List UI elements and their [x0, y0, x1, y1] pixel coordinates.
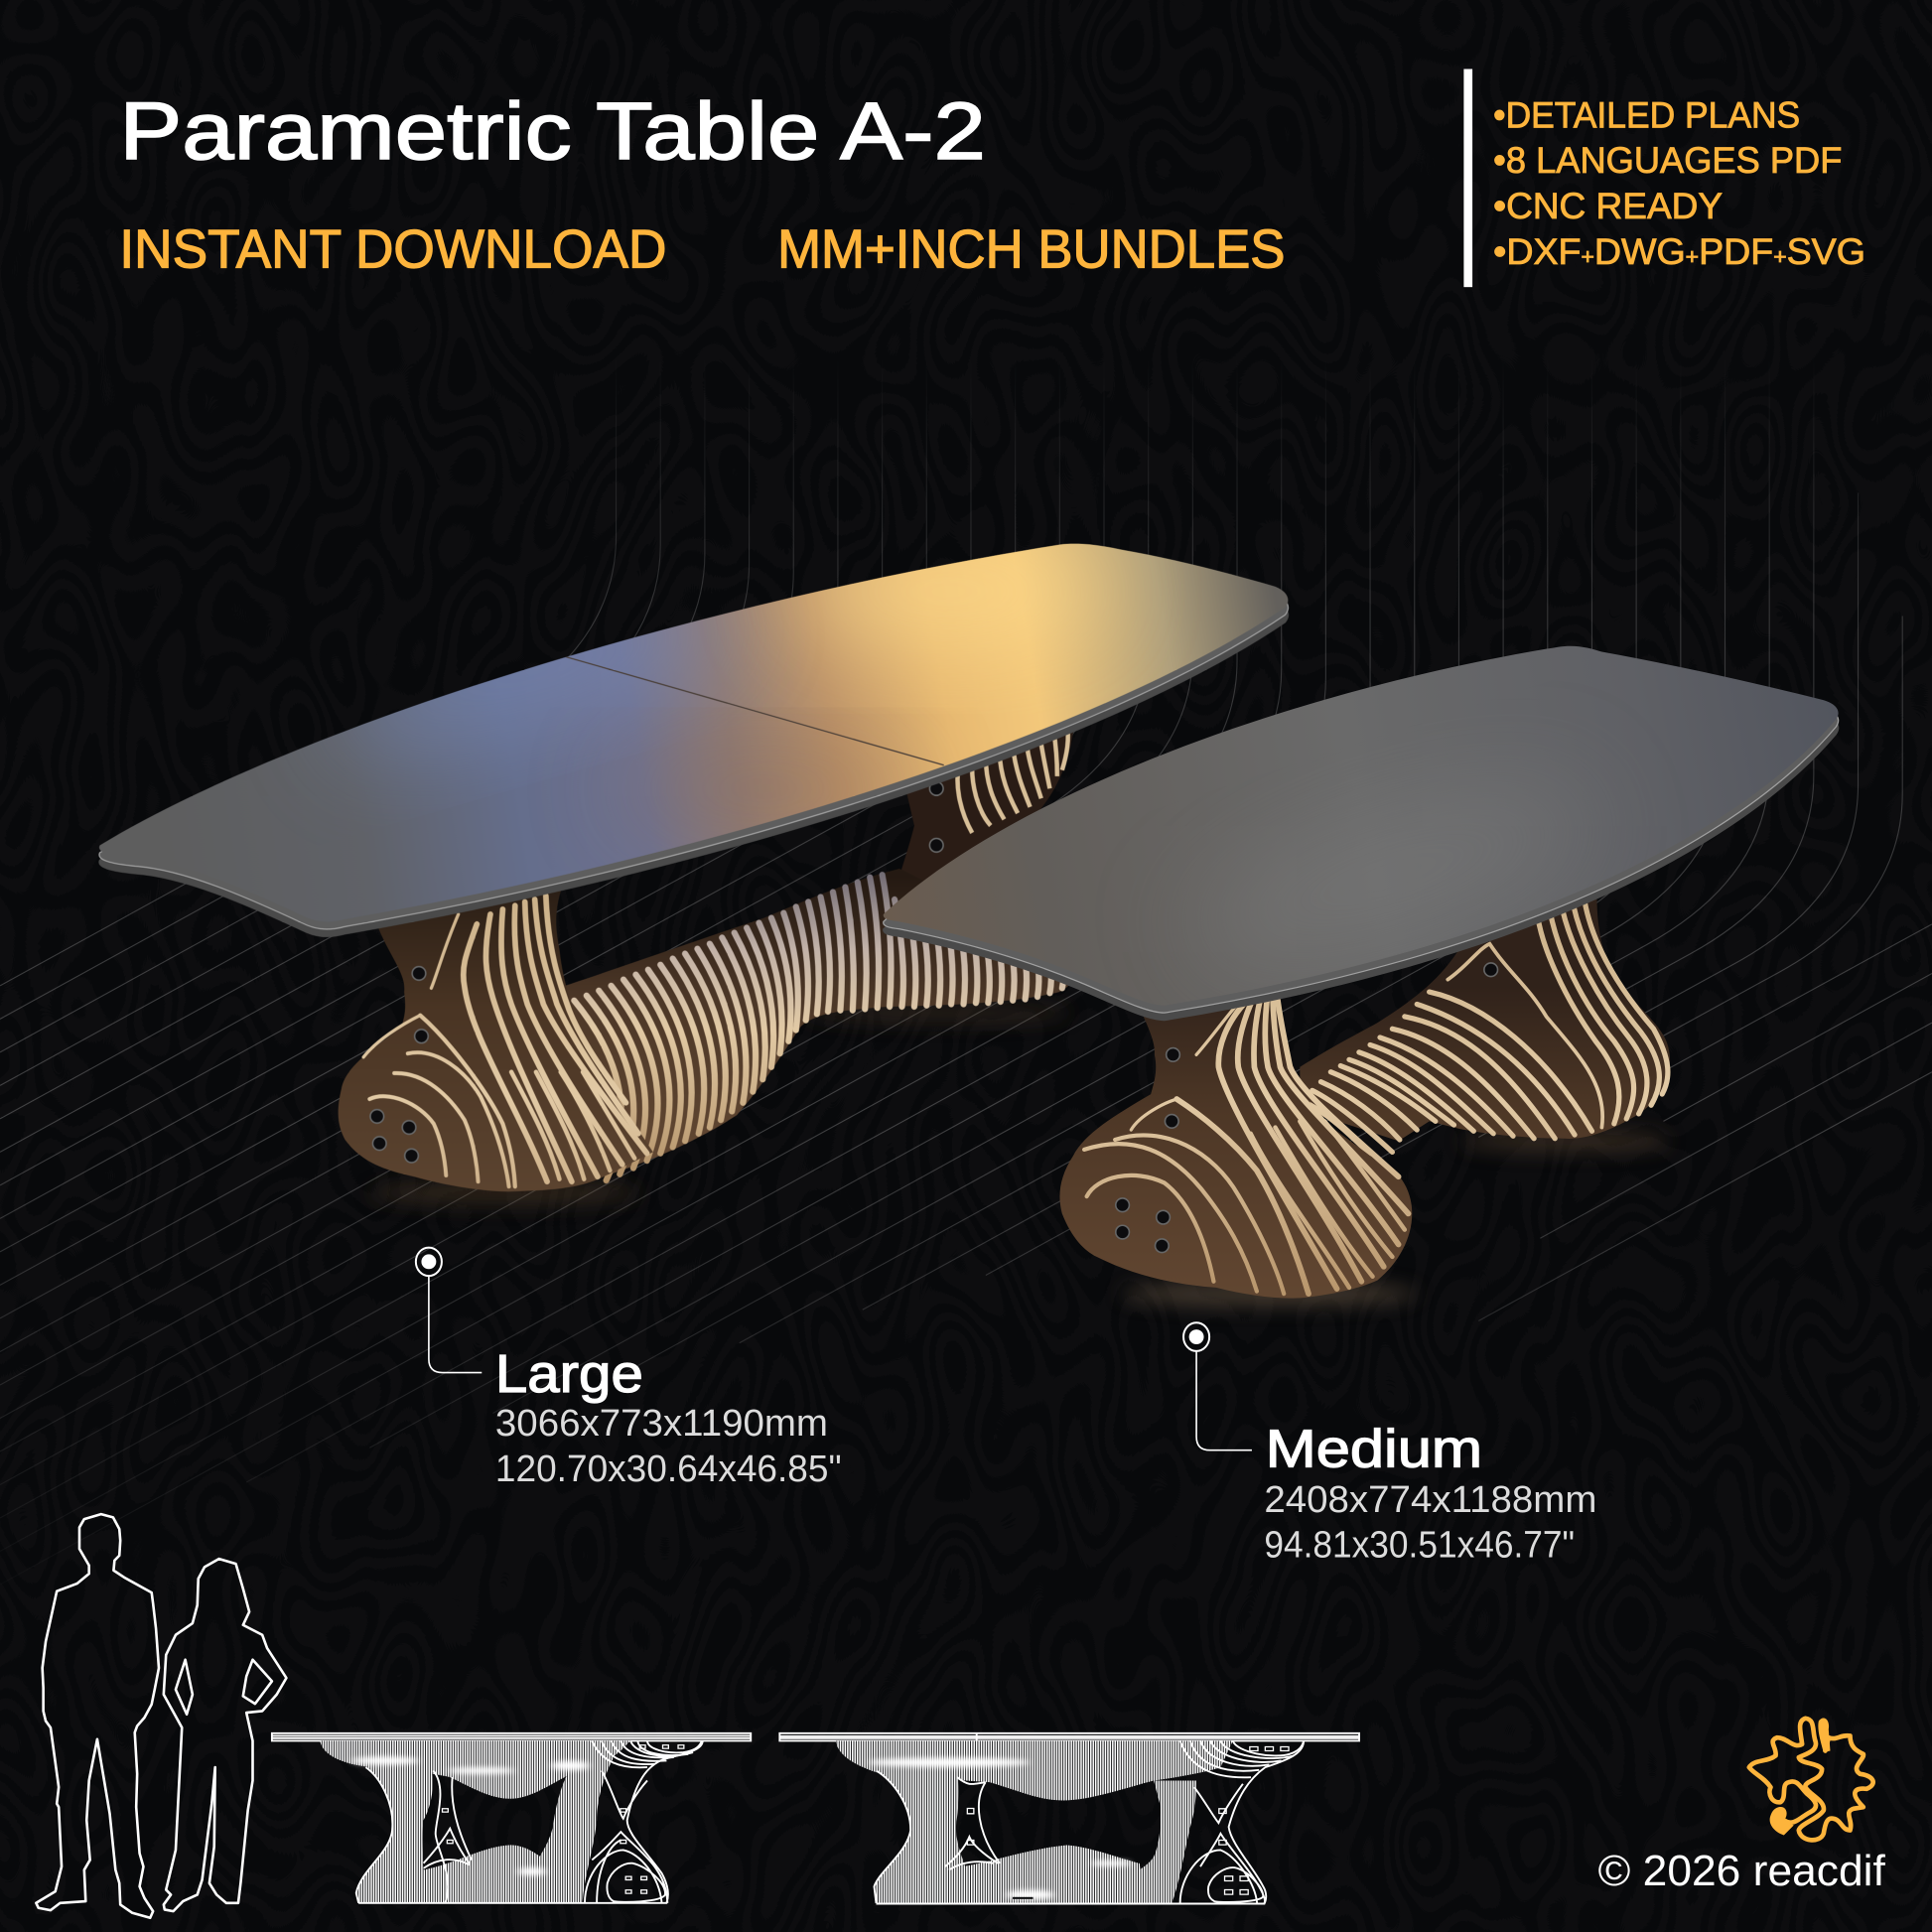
callout: large — [416, 1248, 842, 1490]
top right lobe arcs — [1180, 1740, 1304, 1777]
base slot — [1013, 1897, 1033, 1899]
feature list: •CNC READY — [1493, 186, 1723, 226]
human silhouettes for scale — [36, 1514, 286, 1918]
bolt holes — [967, 1746, 1289, 1894]
left leg contours — [874, 1770, 1000, 1903]
feature list — [1493, 94, 1865, 272]
upper rib band — [836, 1740, 1233, 1800]
logo squiggle — [1749, 1719, 1873, 1840]
logo blobs — [1770, 1718, 1830, 1835]
dimensions mm: large: 3066x773x1190mm — [495, 1403, 828, 1445]
line drawing: medium table side view — [779, 1733, 1359, 1903]
medium table top — [884, 646, 1839, 1021]
lower rib band — [945, 1845, 1144, 1903]
upper rib band — [320, 1740, 630, 1799]
vertical divider bar — [1463, 69, 1472, 287]
large table long body ribs — [530, 869, 1084, 1185]
rib highlights — [351, 1756, 590, 1875]
copyright: © 2026 reacdif — [1598, 1848, 1886, 1895]
medium table bolts — [1116, 1048, 1179, 1253]
label: large: Large — [495, 1345, 643, 1404]
right leg rib fill — [510, 1757, 614, 1903]
top right lobe arcs — [592, 1740, 702, 1767]
floor lines — [0, 357, 1932, 1585]
medium table front neck and foot — [1059, 991, 1412, 1299]
rib highlights — [868, 1757, 1132, 1899]
tabletop bar — [779, 1733, 1359, 1740]
man outline — [36, 1514, 159, 1918]
dimensions inch: medium: 94.81x30.51x46.77" — [1264, 1524, 1575, 1566]
woman outline — [164, 1559, 286, 1911]
left leg contours — [356, 1767, 472, 1903]
large table top — [99, 536, 1288, 936]
large table front neck and foot — [339, 878, 653, 1191]
line drawing: large table side view — [272, 1733, 751, 1903]
large table rear leg — [895, 721, 1074, 907]
left leg rib fill — [356, 1765, 433, 1903]
table large: full 3D render — [99, 536, 1288, 1191]
lower rib band — [424, 1845, 551, 1903]
feature list: •DETAILED PLANS — [1493, 94, 1800, 135]
marker and leader line: medium — [1183, 1322, 1252, 1450]
dimensions inch: large: 120.70x30.64x46.85" — [495, 1449, 842, 1490]
medium table rear bolt — [1484, 963, 1498, 977]
logo — [1749, 1718, 1873, 1840]
table medium: full 3D render — [884, 646, 1839, 1299]
left leg rib fill — [874, 1770, 965, 1903]
title: Parametric Table A-2 — [119, 86, 986, 177]
feature list: •DXF+DWG+PDF+SVG — [1493, 231, 1865, 272]
callout: medium — [1183, 1322, 1596, 1566]
label: medium: Medium — [1266, 1420, 1482, 1478]
medium table rear lobe — [1300, 895, 1670, 1176]
large table bolts — [370, 967, 428, 1163]
feature list: •8 LANGUAGES PDF — [1493, 140, 1842, 181]
right leg contours — [358, 1740, 703, 1903]
subheading: bundles: MM+INCH BUNDLES — [777, 218, 1285, 279]
dimensions mm: medium: 2408x774x1188mm — [1264, 1479, 1596, 1521]
right leg contours — [876, 1740, 1304, 1903]
floor reflections — [369, 1003, 1670, 1307]
tabletop bar — [272, 1733, 751, 1740]
bolt holes — [442, 1745, 684, 1893]
right leg rib fill — [1091, 1780, 1196, 1903]
subheading: instant download: INSTANT DOWNLOAD — [119, 218, 666, 279]
marker and leader line: large — [416, 1248, 482, 1373]
